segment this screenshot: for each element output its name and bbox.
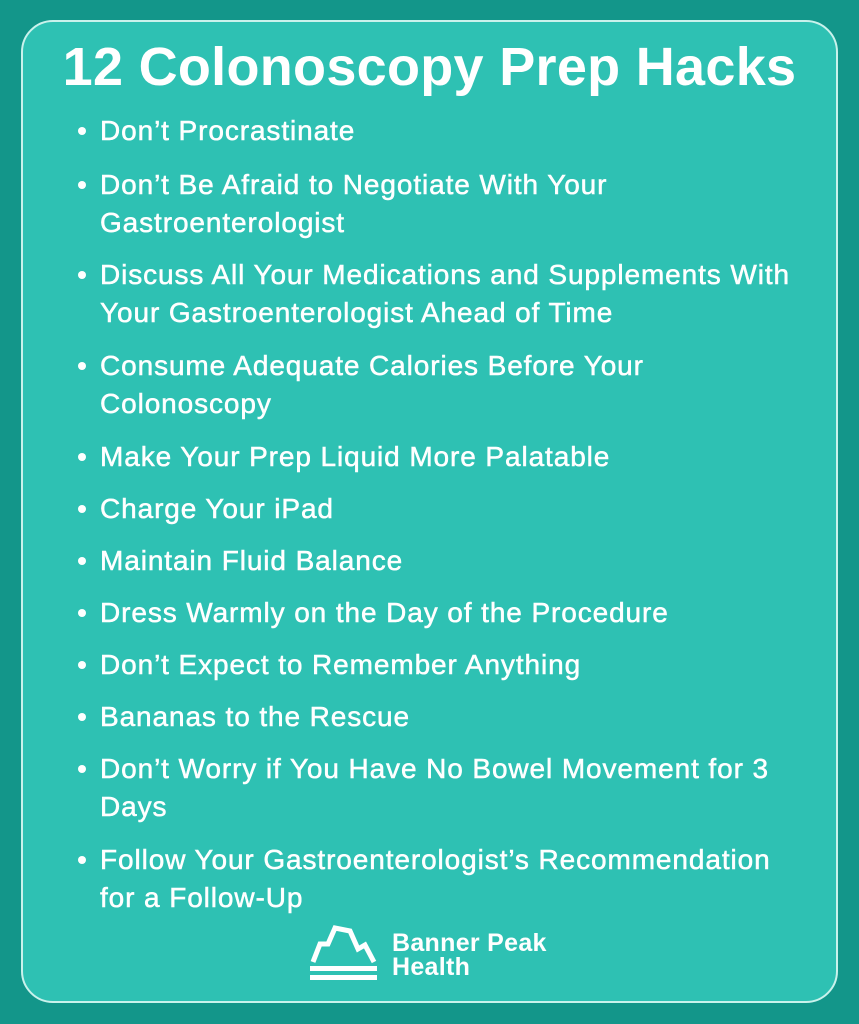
list item 2 [100, 166, 607, 242]
list item 8: Dress Warmly on the Day of the Procedure [100, 597, 669, 628]
list item 12: for a Follow-Up [100, 882, 303, 913]
title: 12 Colonoscopy Prep Hacks [63, 37, 796, 97]
list item 9: Don’t Expect to Remember Anything [100, 649, 581, 680]
list item 1: Don’t Procrastinate [100, 115, 355, 146]
list item 10: Bananas to the Rescue [100, 701, 410, 732]
list item 11: Days [100, 791, 167, 822]
list item 2: Don’t Be Afraid to Negotiate With Your [100, 169, 607, 200]
list item 6: Charge Your iPad [100, 493, 334, 524]
list item 12: Follow Your Gastroenterologist’s Recommendation [100, 844, 771, 875]
list item 4 [100, 347, 644, 423]
list item 3 [100, 256, 790, 332]
logo text [392, 929, 547, 981]
list item 2: Gastroenterologist [100, 207, 345, 238]
icon: mountain [310, 925, 377, 980]
list item 11: Don’t Worry if You Have No Bowel Movement for 3 [100, 753, 769, 784]
list item 3: Your Gastroenterologist Ahead of Time [100, 297, 613, 328]
logo text: Health [392, 953, 470, 981]
list item 4: Consume Adequate Calories Before Your [100, 350, 644, 381]
logo [310, 925, 547, 981]
logo text: Banner Peak [392, 929, 547, 957]
list item 5: Make Your Prep Liquid More Palatable [100, 441, 610, 472]
list item 12 [100, 841, 771, 917]
list item 3: Discuss All Your Medications and Supplements With [100, 259, 790, 290]
list item 4: Colonoscopy [100, 388, 272, 419]
list item 11 [100, 750, 769, 826]
list item 7: Maintain Fluid Balance [100, 545, 403, 576]
